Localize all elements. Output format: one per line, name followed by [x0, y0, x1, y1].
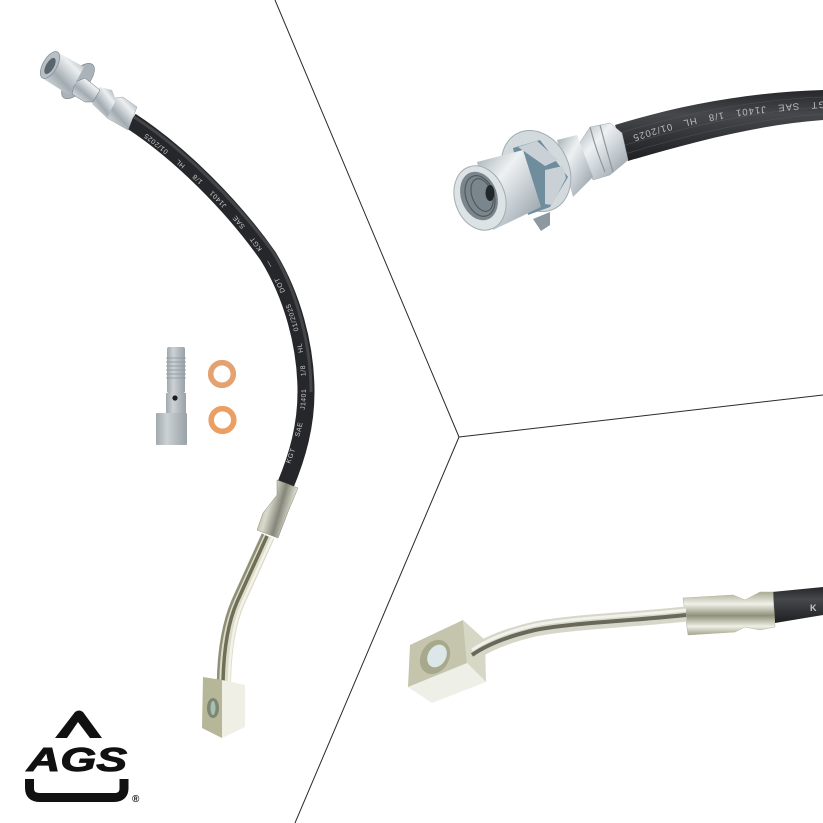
copper washer bottom	[211, 409, 234, 431]
banjo block	[202, 677, 245, 738]
crimp grooves	[590, 125, 613, 172]
lower crimp fitting	[257, 480, 298, 538]
hose body	[131, 117, 311, 486]
close-up hose end	[772, 587, 823, 623]
steel brake tube	[218, 534, 272, 682]
logo chevron	[55, 710, 102, 738]
close-up hose ribs	[620, 97, 823, 154]
close-up hose	[615, 90, 823, 161]
steel tube	[472, 610, 686, 655]
logo bracket	[30, 779, 124, 798]
blue nut shadow	[513, 140, 568, 215]
thread bore	[454, 166, 504, 226]
block	[408, 620, 486, 703]
hex flats	[518, 141, 566, 205]
close-up: bottom fitting	[408, 587, 823, 703]
AGS logo	[26, 710, 140, 805]
nut opening	[445, 158, 515, 238]
logo wordmark: AGS	[26, 741, 127, 778]
thread rings	[460, 171, 500, 221]
close-up: top fitting	[453, 90, 823, 231]
nut body	[477, 150, 541, 230]
hose marking: K	[810, 603, 817, 613]
retaining tab	[533, 212, 550, 231]
banjo bolt	[156, 347, 187, 445]
registered mark: ®	[132, 794, 140, 805]
dividing lines	[275, 0, 823, 823]
upper fitting	[36, 49, 137, 130]
bore hole	[486, 185, 494, 201]
retaining washer	[488, 119, 584, 223]
neck	[557, 135, 593, 197]
copper washer top	[211, 363, 233, 385]
full brake hose assembly	[40, 51, 314, 738]
crimp collar	[577, 123, 628, 180]
hose printed markings: KGT SAE J1401 1/8 HL 01/2025 DOT — KGT SAE J1401 1/8 HL 01/2025	[144, 134, 306, 464]
crimp	[683, 592, 775, 635]
